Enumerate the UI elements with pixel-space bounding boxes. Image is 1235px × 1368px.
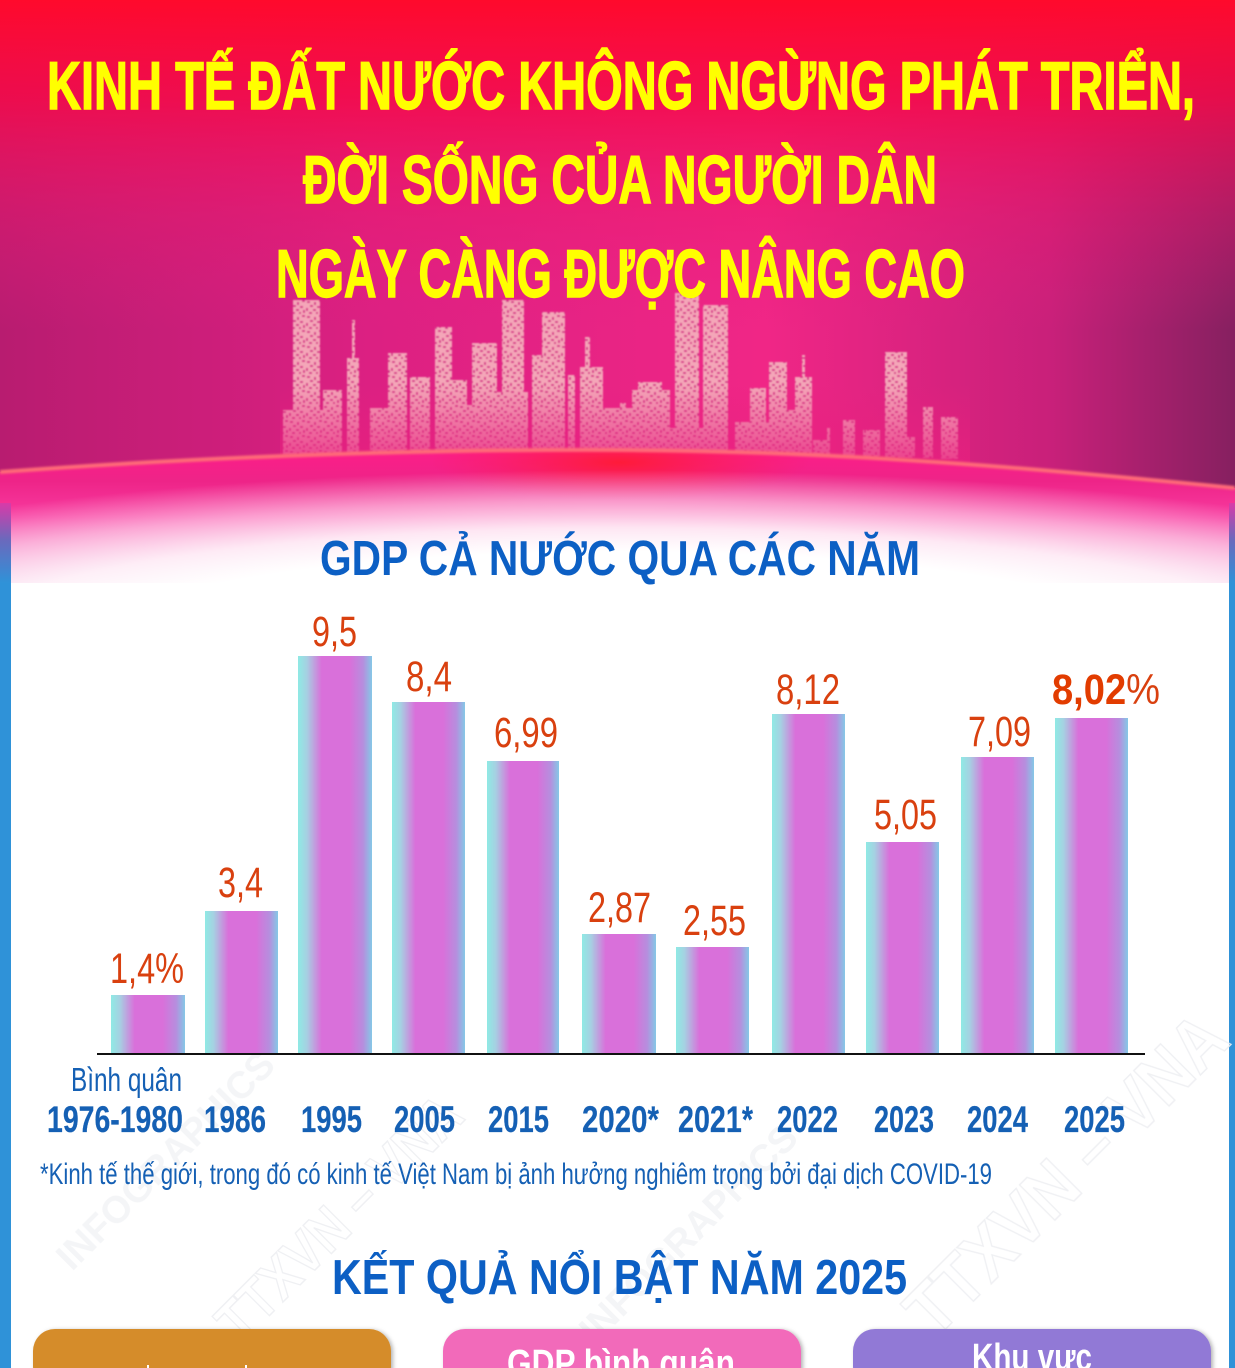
year labels: 2024 [967, 1099, 1028, 1140]
year labels: 2021* [678, 1099, 753, 1140]
year labels [47, 1061, 1125, 1140]
illustration: city skyline [280, 293, 970, 463]
year labels: 2023 [874, 1099, 934, 1140]
bars [111, 656, 1128, 1054]
year labels: 2015 [488, 1099, 549, 1140]
value labels: 8,02% [1052, 666, 1160, 714]
heading: 2025 highlights: KẾT QUẢ NỔI BẬT NĂM 2025 [332, 1250, 907, 1305]
value labels: 2,87 [588, 884, 651, 932]
year labels: 2020* [582, 1099, 659, 1140]
heading: GDP by year: GDP CẢ NƯỚC QUA CÁC NĂM [320, 531, 920, 586]
year labels: 2022 [777, 1099, 838, 1140]
curved wave divider [0, 450, 1235, 583]
title [47, 47, 1195, 312]
header background [0, 0, 1235, 590]
value labels: 2,55 [683, 897, 746, 945]
card: GDP per capita [443, 1329, 801, 1368]
watermarks [56, 1020, 1232, 1329]
card: sectors [853, 1329, 1211, 1368]
value labels [110, 608, 1160, 993]
year labels: Bình quân [71, 1061, 182, 1098]
value labels: 3,4 [218, 859, 263, 907]
value labels: 7,09 [968, 708, 1031, 756]
watermarks: TTXVN – VNA [203, 1082, 475, 1354]
value labels: 6,99 [494, 709, 558, 757]
year labels: 1976-1980 [47, 1099, 183, 1140]
year labels: 1986 [204, 1099, 266, 1140]
bar chart: GDP growth [47, 608, 1160, 1140]
watermarks: INFOGRAPHICS [49, 1044, 283, 1278]
white content panel [0, 583, 1235, 1368]
side borders [0, 503, 1235, 1368]
value labels: 8,12 [776, 666, 840, 714]
card: orange [33, 1329, 391, 1368]
title: ĐỜI SỐNG CỦA NGƯỜI DÂN [303, 141, 937, 218]
watermarks: INFOGRAPHICS [572, 1117, 806, 1351]
value labels: 5,05 [874, 791, 937, 839]
year labels: 2025 [1064, 1099, 1125, 1140]
value labels: 9,5 [312, 608, 357, 656]
value labels: 1,4% [110, 945, 184, 993]
year labels: 1995 [301, 1099, 362, 1140]
value labels: 8,4 [406, 653, 452, 701]
baseline axis [97, 1053, 1145, 1055]
year labels: 2005 [394, 1099, 455, 1140]
